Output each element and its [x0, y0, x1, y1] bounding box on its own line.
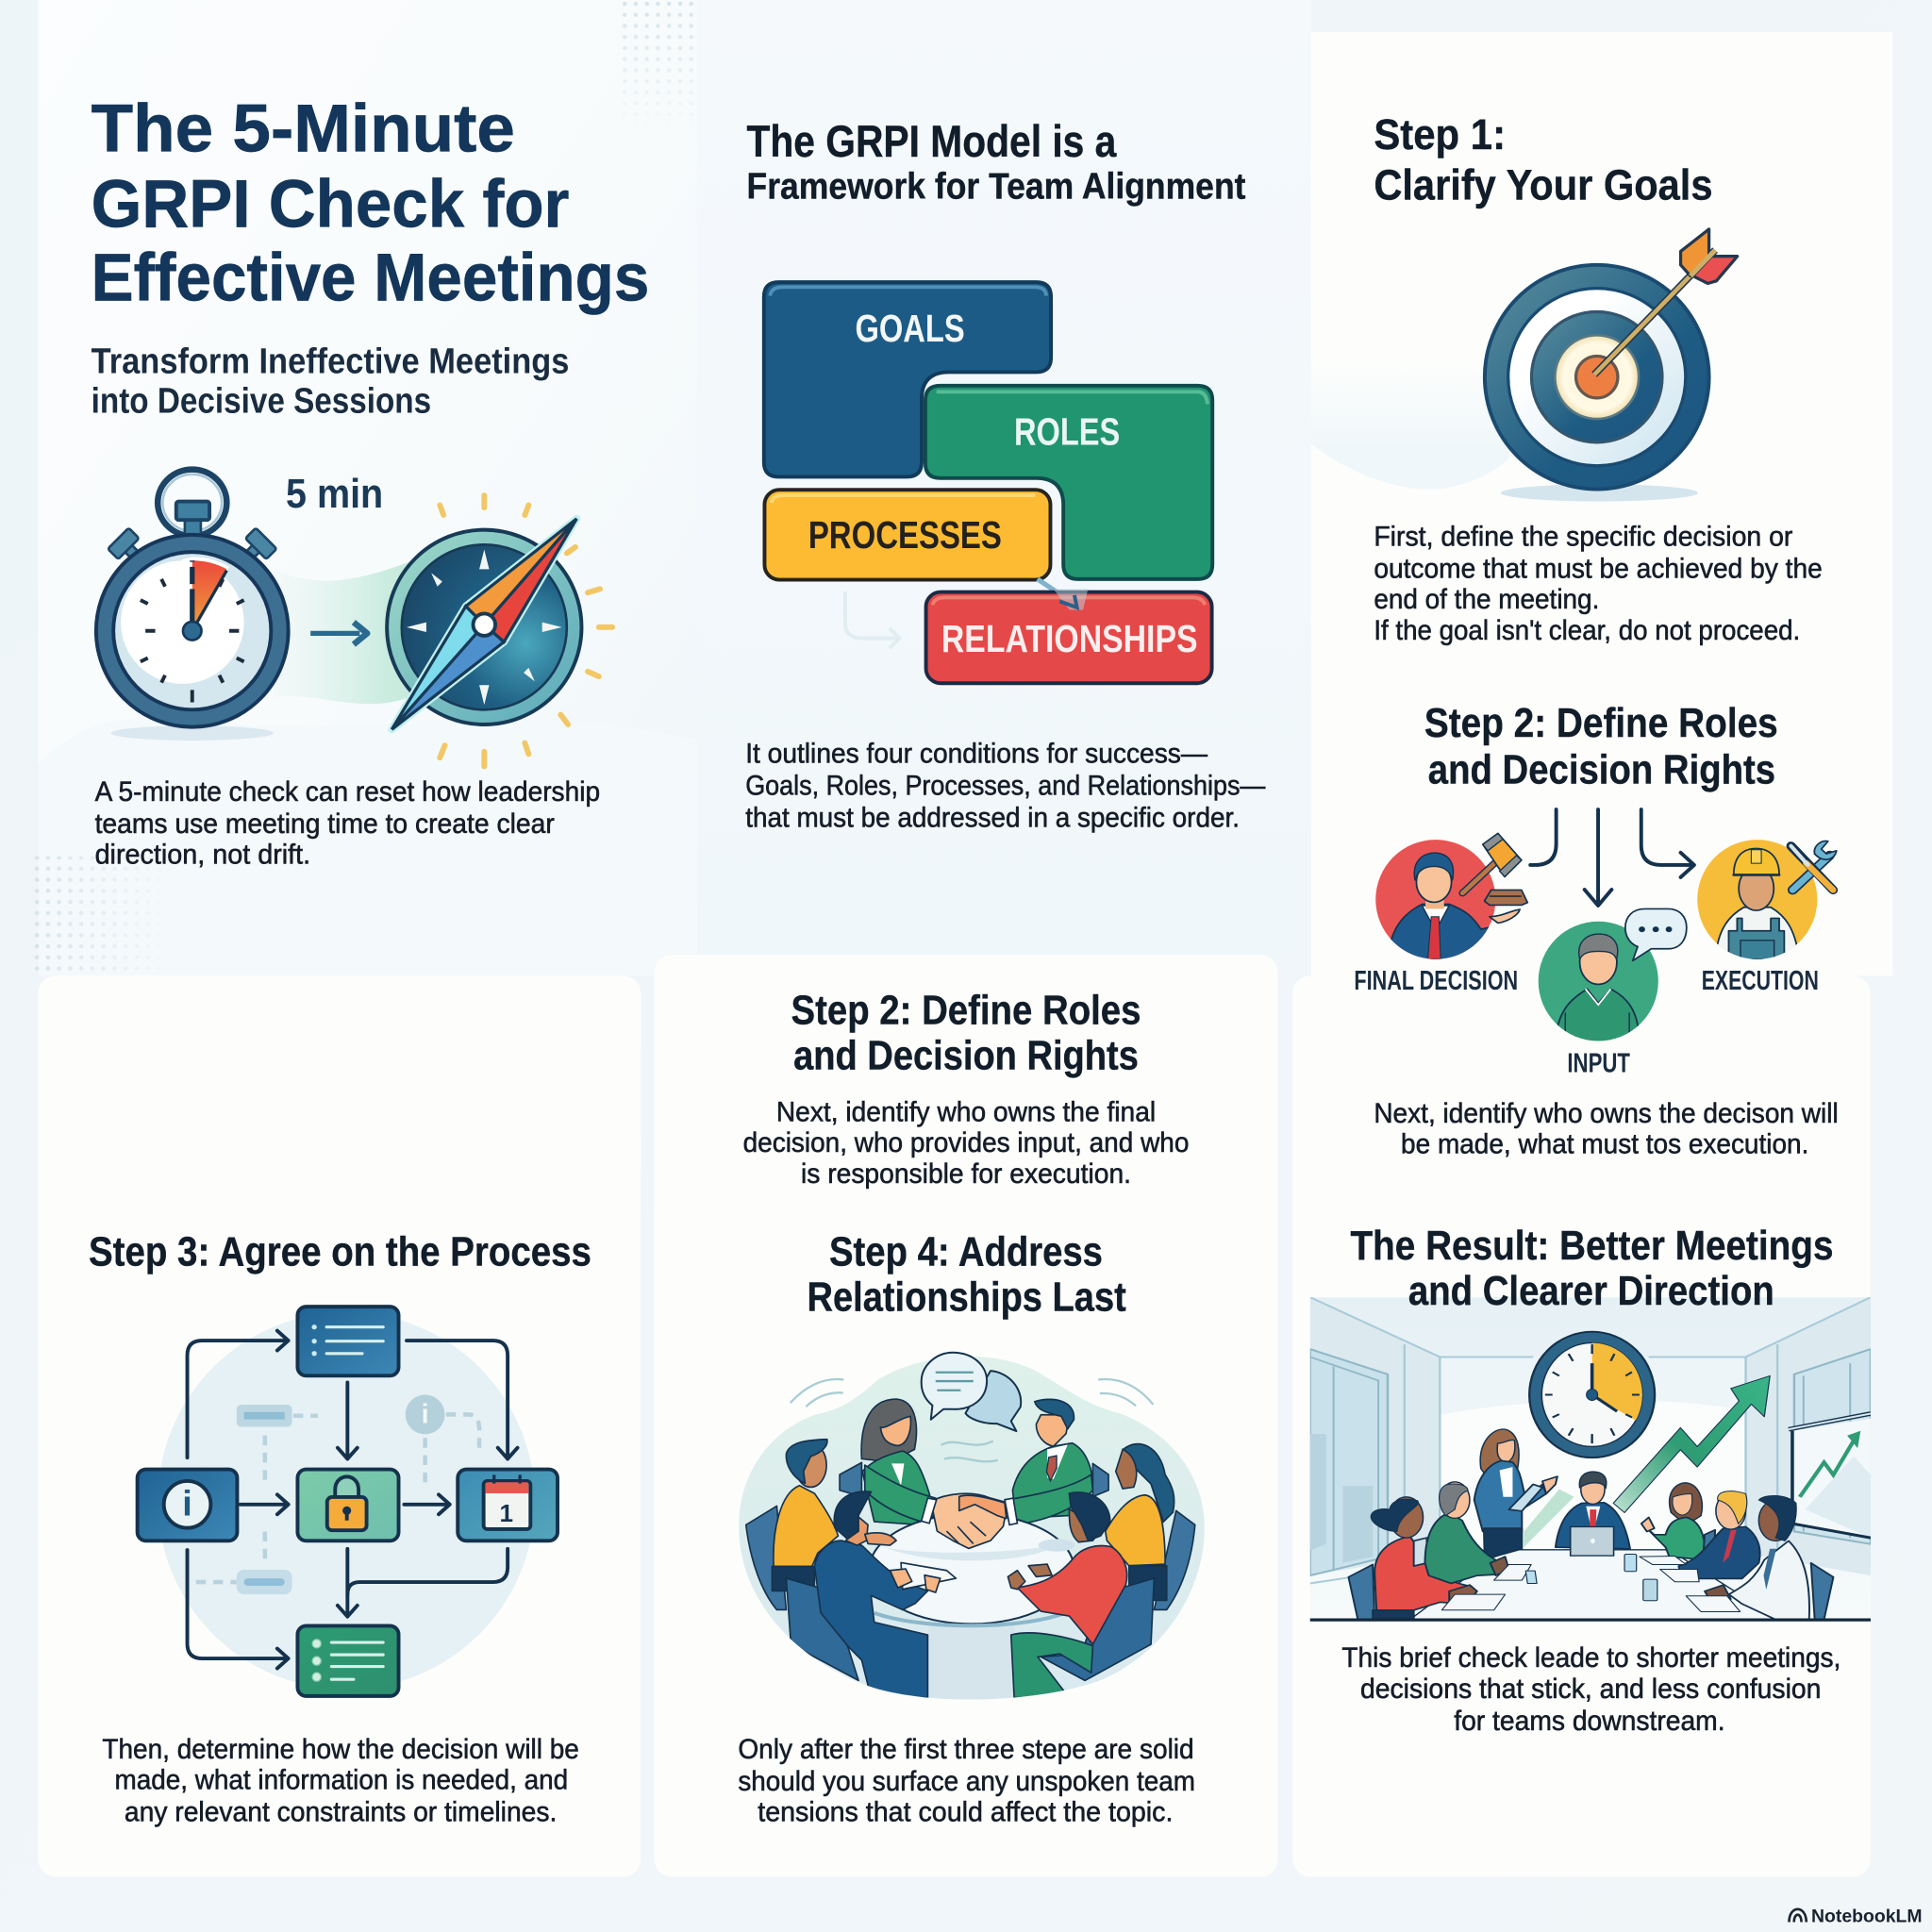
body text: roles overview: [1374, 1098, 1839, 1160]
person: right man blond: [1678, 1491, 1760, 1578]
person: front left man: [786, 1491, 956, 1698]
body text: intro: teams use meeting time to create clear: [95, 808, 555, 840]
body text: step 2: [743, 1097, 1189, 1190]
person: back left woman: [861, 1399, 936, 1524]
faint annotations: i: [422, 1400, 429, 1430]
person: left woman red: [1348, 1497, 1477, 1620]
room walls and windows: [1310, 1297, 1871, 1583]
illustration: meeting room with clock and growth arrow: [1310, 1297, 1871, 1620]
block: processes: [764, 490, 1050, 580]
body text: step 3: [102, 1734, 579, 1827]
body text: result: This brief check leade to shorter meetings,: [1341, 1642, 1840, 1674]
body text: step 1: end of the meeting.: [1374, 584, 1599, 615]
diagram: process flow: [138, 1307, 558, 1696]
heading: step 2: [791, 988, 1141, 1079]
arrows: process connectors: [188, 1331, 518, 1668]
heading: step 2: Step 2: Define Roles: [791, 988, 1141, 1033]
icon: input person: [1539, 908, 1687, 1044]
body text: step 1: [1374, 522, 1823, 646]
label: input: INPUT: [1567, 1048, 1630, 1078]
body text: step 3: made, what information is needed, and: [114, 1764, 568, 1795]
body text: step 1: If the goal isn't clear, do not proceed.: [1374, 615, 1800, 646]
table: [1415, 1549, 1734, 1617]
handshake: [922, 1493, 1017, 1548]
wall clock with shaded minutes: [1529, 1332, 1655, 1457]
title: Effective Meetings: [92, 241, 649, 316]
body text: result: for teams downstream.: [1454, 1706, 1725, 1737]
title: The 5-Minute: [92, 92, 515, 167]
body text: step 3: any relevant constraints or timelines.: [125, 1796, 557, 1827]
heading: GRPI model: [747, 116, 1245, 207]
block: processes: PROCESSES: [808, 513, 1002, 557]
heading: step 1: Step 1:: [1374, 110, 1506, 158]
body text: GRPI: Goals, Roles, Processes, and Relationships—: [745, 770, 1266, 801]
body text: intro: [95, 776, 600, 871]
growth arrow: [1613, 1375, 1770, 1512]
subtitle: [92, 342, 569, 422]
person: centre manager with laptop: [1556, 1472, 1630, 1556]
label: final decision: FINAL DECISION: [1354, 966, 1518, 996]
block: goals: [764, 282, 1051, 476]
box: decision lock: [297, 1470, 399, 1541]
body text: roles overview: Next, identify who owns the decison will: [1374, 1098, 1839, 1129]
heading: step 4: Relationships Last: [808, 1275, 1126, 1321]
heading: step 1: [1374, 110, 1713, 209]
person: left yellow: [772, 1440, 838, 1591]
panel: GRPI model: [697, 0, 1311, 958]
heading: GRPI model: The GRPI Model is a: [747, 116, 1117, 166]
watermark: NotebookLM: NotebookLM: [1811, 1907, 1923, 1927]
icon: compass: [387, 495, 612, 766]
panel: step 2 and step 4 card: [655, 955, 1277, 1876]
icon: final decision person: [1375, 833, 1527, 962]
arrow: processes to relationships: [1038, 579, 1074, 604]
table items: [1441, 1554, 1740, 1611]
presentation screen with chart: [1789, 1413, 1871, 1538]
back chairs: [840, 1462, 1108, 1496]
body text: step 3: Then, determine how the decision will be: [102, 1734, 579, 1765]
body text: step 1: outcome that must be achieved by the: [1374, 554, 1823, 585]
body text: step 2: decision, who provides input, and who: [743, 1127, 1189, 1158]
panel: step 1 and step 2 roles: [1311, 32, 1892, 1078]
person: back right man: [1008, 1399, 1092, 1524]
label: 5 min: 5 min: [286, 472, 383, 517]
body text: result: decisions that stick, and less confusion: [1360, 1674, 1821, 1705]
heading: step 4: [808, 1229, 1126, 1321]
block: roles: [925, 386, 1212, 579]
block: relationships: RELATIONSHIPS: [941, 617, 1198, 660]
person: presenter: [1474, 1429, 1557, 1559]
body text: step 4: Only after the first three stepe are solid: [738, 1734, 1194, 1765]
person: far right man white shirt: [1705, 1495, 1833, 1620]
label: execution: EXECUTION: [1702, 966, 1819, 996]
box: information: i: [182, 1485, 192, 1524]
body text: intro: A 5-minute check can reset how leadership: [95, 776, 600, 808]
panel: step 3 card: [38, 975, 641, 1876]
icon: stopwatch: [96, 470, 289, 741]
arrows: role connectors: [1530, 809, 1694, 906]
block: goals: GOALS: [855, 307, 965, 350]
speech bubbles: [922, 1353, 1021, 1431]
title: GRPI Check for: [92, 166, 569, 242]
body text: GRPI: It outlines four conditions for success—: [745, 738, 1208, 769]
heading: step 4: Step 4: Address: [829, 1229, 1103, 1274]
title: [92, 92, 649, 316]
table and pedestal: [929, 1698, 1011, 1700]
person: front right man: [1008, 1492, 1154, 1698]
floor line: [1310, 1615, 1871, 1624]
box: calendar: 1: [500, 1499, 513, 1527]
heading: step 2 roles: Step 2: Define Roles: [1424, 701, 1778, 746]
subtitle: Transform Ineffective Meetings: [92, 342, 569, 382]
block: roles: ROLES: [1014, 410, 1120, 454]
green glow connecting stopwatch and compass: [274, 552, 434, 704]
icon: execution person: [1697, 840, 1837, 962]
person: right woman: [1106, 1444, 1174, 1600]
heading: GRPI model: Framework for Team Alignment: [747, 166, 1245, 207]
icon: target and arrow: [1485, 229, 1738, 502]
body text: step 2: is responsible for execution.: [801, 1158, 1131, 1190]
body text: intro: direction, not drift.: [95, 840, 310, 871]
box: calendar: [458, 1470, 558, 1541]
heading: step 2: and Decision Rights: [793, 1034, 1139, 1079]
arrow: stopwatch to compass: [310, 623, 367, 644]
body text: step 4: should you surface any unspoken team: [738, 1766, 1195, 1797]
diagram: decision roles: [1354, 809, 1837, 1078]
panel: roles overview and result card: [1292, 975, 1871, 1876]
diagram: interlocking GRPI blocks: [764, 282, 1212, 683]
heading: the result: [1351, 1224, 1834, 1314]
subtitle: into Decisive Sessions: [92, 382, 431, 422]
box: agenda list: [297, 1307, 399, 1375]
motion marks: [791, 1379, 1153, 1461]
body text: roles overview: be made, what must tos execution.: [1401, 1129, 1808, 1160]
arrow: faint connector: [845, 591, 899, 648]
heading: step 1: Clarify Your Goals: [1374, 161, 1713, 209]
body text: step 2: Next, identify who owns the final: [776, 1097, 1156, 1128]
body text: GRPI: [745, 738, 1266, 833]
block: relationships: [926, 589, 1212, 683]
body text: GRPI: that must be addressed in a specific order.: [745, 802, 1240, 833]
body text: step 4: [738, 1734, 1195, 1827]
heading: step 2 roles: and Decision Rights: [1428, 748, 1775, 793]
body text: step 4: tensions that could affect the topic.: [758, 1796, 1173, 1827]
person: right woman green: [1641, 1483, 1705, 1559]
body text: step 1: First, define the specific decision or: [1374, 522, 1792, 553]
box: information: [138, 1470, 237, 1541]
person: left man green: [1414, 1482, 1508, 1583]
body text: result: [1341, 1642, 1840, 1737]
heading: the result: The Result: Better Meetings: [1351, 1224, 1834, 1269]
box: checklist: [297, 1625, 399, 1696]
heading: step 2 roles: [1424, 701, 1778, 793]
panel: title and 5 minute check: [35, 0, 702, 975]
faint annotations: [196, 1395, 479, 1594]
heading: the result: and Clearer Direction: [1408, 1269, 1774, 1314]
heading: step 3: Step 3: Agree on the Process: [89, 1229, 591, 1274]
illustration: team handshake around table: [739, 1353, 1205, 1701]
